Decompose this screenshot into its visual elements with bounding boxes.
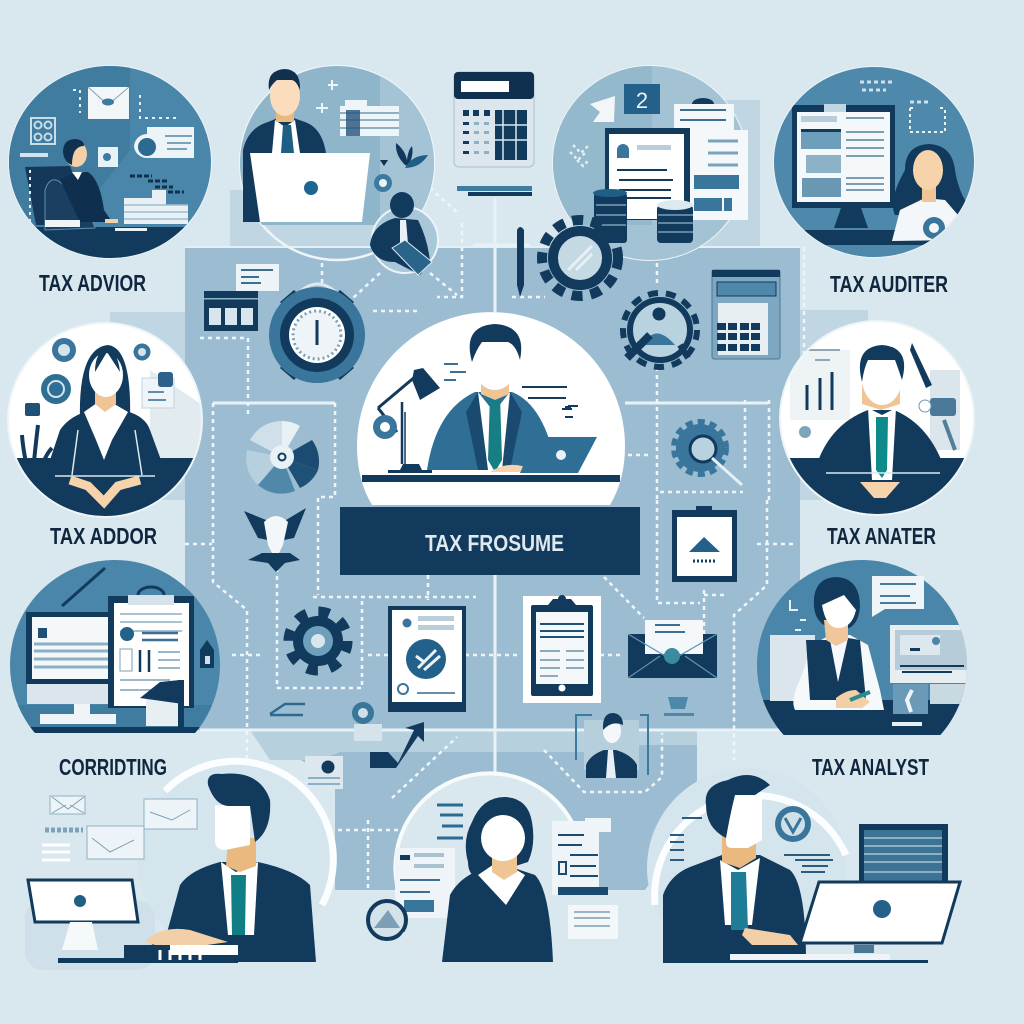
icon: plant	[396, 143, 428, 168]
document right	[552, 818, 611, 895]
icon: pen	[517, 227, 524, 297]
label: Tax Advior: TAX ADVIOR	[39, 270, 146, 296]
icon: black gear	[289, 612, 347, 670]
panel: lower left documents	[0, 555, 225, 733]
bar above centre	[457, 186, 532, 196]
icon: trophy cup	[664, 697, 694, 716]
advisor seated in chair	[25, 139, 118, 230]
clipboard document	[108, 587, 194, 708]
icon: desk lamp	[373, 368, 440, 473]
document table	[340, 100, 399, 136]
small shelf icon	[200, 640, 214, 668]
icon: dial box	[31, 118, 55, 144]
icon: alarm clock	[269, 284, 365, 383]
icon: calendar	[204, 291, 258, 331]
label: Tax Addor: TAX ADDOR	[50, 523, 157, 549]
icon: gear with document	[542, 220, 618, 296]
pen & clip	[799, 343, 956, 450]
person in frame icon	[576, 713, 648, 778]
clipboard emblem card	[672, 506, 737, 582]
stacked chart bars	[124, 190, 188, 224]
person: suited man	[243, 69, 326, 222]
title bar	[340, 507, 640, 575]
icon: person in ring	[370, 192, 438, 275]
label: Corridting: CORRIDTING	[59, 754, 167, 780]
desktop monitor	[28, 880, 138, 962]
report sheet	[688, 130, 748, 220]
person: woman	[50, 345, 160, 509]
chart document	[805, 350, 840, 410]
panel: lower right analyst	[750, 555, 975, 735]
eye note	[98, 147, 118, 167]
icon: eagle	[244, 508, 306, 572]
person: suited man at keyboard	[58, 774, 316, 963]
icon: calculator	[454, 72, 534, 167]
chat note	[134, 127, 194, 158]
icon: teal gear magnifier	[674, 422, 742, 485]
chair back	[770, 635, 815, 701]
person: man with teal tie	[815, 345, 945, 520]
small note	[305, 756, 343, 789]
plant	[20, 424, 54, 458]
panel: seated woman	[0, 323, 210, 520]
panel: right male analyst	[775, 321, 980, 520]
envelope	[628, 620, 717, 678]
icon: crest badge	[775, 806, 811, 842]
coin stacks	[593, 189, 693, 243]
panel: top right auditor monitor	[770, 60, 980, 260]
panel: documents cluster	[552, 65, 748, 261]
panel: bottom right man with laptop	[640, 768, 970, 1023]
clipboard tablet	[523, 595, 601, 703]
clipboard document	[674, 98, 734, 176]
laptop on desk	[520, 437, 597, 473]
icons floating	[41, 338, 150, 404]
label: Tax Auditer: TAX AUDITER	[830, 271, 948, 297]
speech note	[872, 576, 924, 617]
icon: calculator right	[712, 270, 780, 359]
icon: magnifier gear person	[623, 293, 697, 367]
small marks	[270, 704, 305, 715]
icon: pie chart	[246, 421, 319, 494]
right screen	[890, 625, 970, 726]
person: woman in vest	[793, 577, 884, 710]
monitor screen	[792, 104, 895, 228]
back monitor	[859, 824, 948, 884]
resume frame	[605, 128, 690, 220]
monitor	[26, 612, 116, 724]
panel: central presenter dome	[357, 312, 625, 505]
person: man at laptop	[663, 775, 806, 962]
panel: bottom centre woman	[368, 773, 618, 1003]
person: woman in blazer	[442, 797, 553, 962]
person: central man	[427, 324, 557, 472]
resume certificate card	[388, 606, 466, 712]
pen	[62, 568, 105, 606]
laptop	[663, 882, 960, 963]
person: woman auditor	[892, 144, 968, 241]
icon: small dial	[374, 160, 392, 192]
icon: small badge	[352, 702, 382, 741]
note	[142, 372, 174, 408]
laptop	[250, 153, 370, 222]
icon: check arrow	[370, 722, 424, 768]
number card: 2	[636, 88, 648, 113]
number card	[624, 84, 660, 114]
panel: man with laptop	[230, 60, 440, 260]
desk organiser	[140, 680, 184, 730]
label: Tax Analyst: TAX ANALYST	[812, 754, 929, 780]
title bar: TAX FROSUME	[425, 530, 564, 556]
label: Tax Anater: TAX ANATER	[827, 523, 936, 549]
icon: envelope	[88, 87, 129, 119]
central connector panel	[110, 100, 868, 890]
icon: magnifier	[368, 901, 436, 958]
note card	[236, 264, 279, 291]
document left	[395, 848, 455, 918]
panel: tax advisor at desk	[8, 65, 212, 259]
icon: paper plane	[590, 96, 615, 122]
panel: bottom left man at computer	[0, 761, 340, 1024]
